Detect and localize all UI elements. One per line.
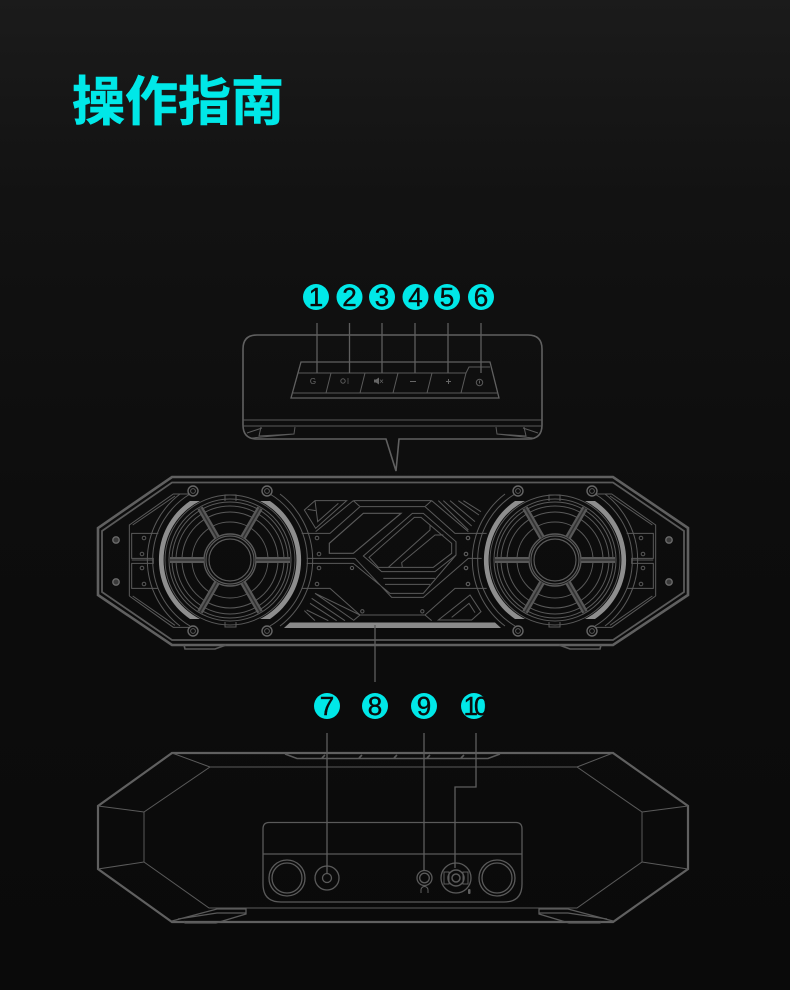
speaker back view: [98, 753, 688, 923]
number badges: 1: [309, 282, 323, 312]
headphone jack: [417, 870, 432, 886]
port panel: [263, 822, 522, 902]
number badges: 4: [408, 282, 423, 312]
number badges: 6: [474, 282, 488, 312]
light bar: [284, 622, 501, 628]
mic jack: [441, 863, 471, 893]
center grille: [302, 501, 487, 621]
number badges: 10: [464, 691, 488, 721]
right port: [479, 860, 515, 896]
left port: [269, 860, 305, 896]
left speaker half: [113, 486, 321, 649]
speaker front view: [98, 477, 688, 649]
top button strip: [285, 754, 500, 758]
number badges: 7: [320, 691, 334, 721]
top detail panel: [243, 335, 542, 471]
right speaker half: [464, 486, 672, 649]
control strip: [291, 362, 499, 398]
number badges: 8: [368, 691, 382, 721]
number badges: 2: [342, 282, 357, 312]
button icons: G: [310, 377, 316, 386]
number badges: [303, 282, 494, 721]
control strip: ×: [379, 377, 384, 386]
leader lines: [317, 323, 481, 873]
title: 操作指南: [72, 73, 284, 132]
aux port: [315, 866, 339, 890]
number badges: 3: [375, 282, 389, 312]
number badges: 5: [440, 282, 454, 312]
feet: [172, 909, 246, 923]
number badges: 9: [417, 691, 431, 721]
